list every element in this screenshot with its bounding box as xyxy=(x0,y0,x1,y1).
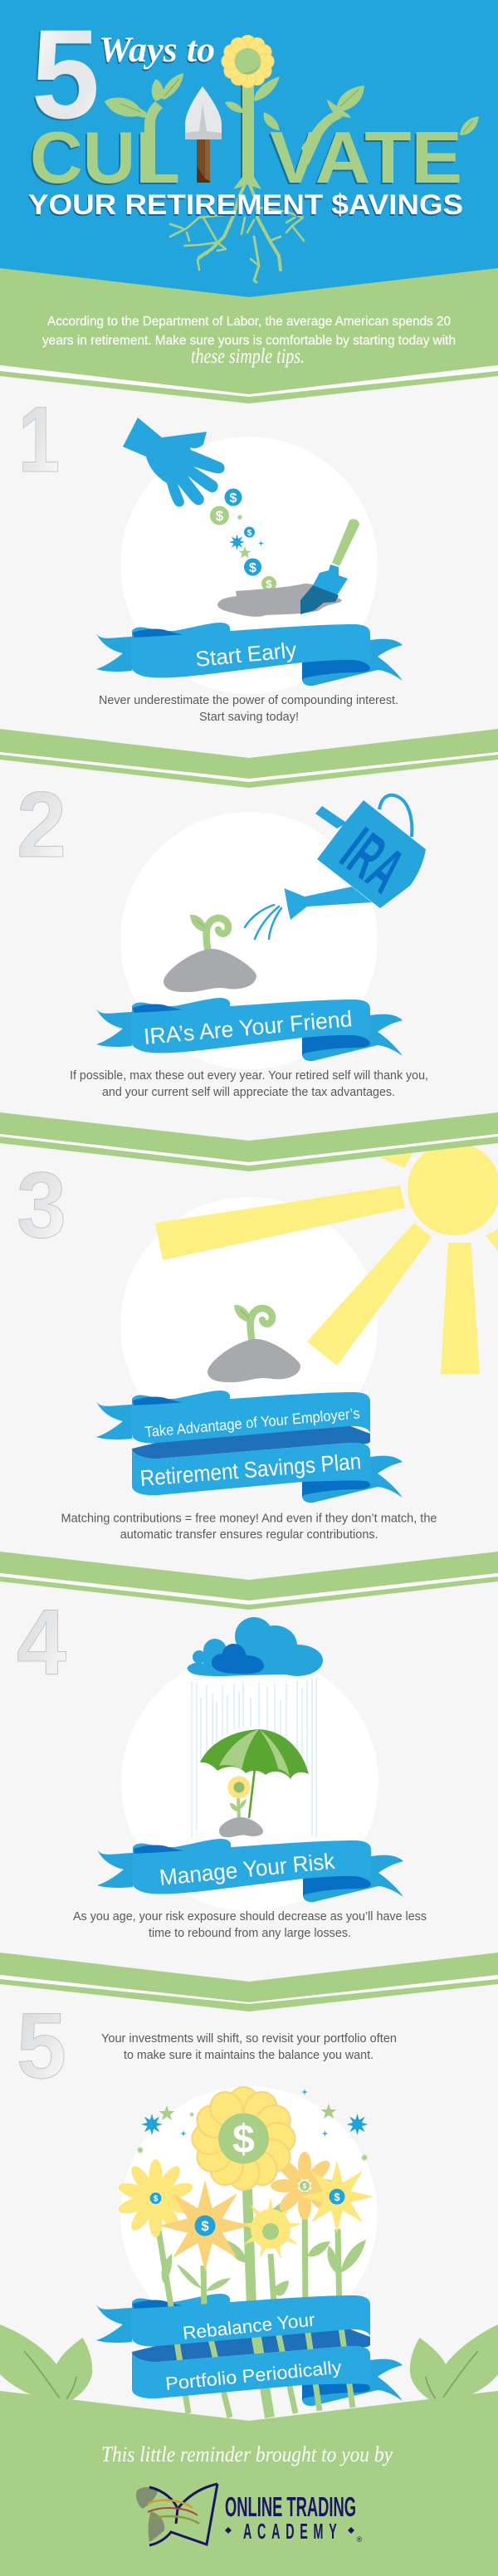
back yellow flower xyxy=(238,2197,303,2261)
icon: watering can xyxy=(284,795,426,920)
front ribbon for step 5 xyxy=(132,2295,370,2398)
mound with sprout xyxy=(208,1305,300,1382)
intro text xyxy=(42,315,456,348)
double ribbon xyxy=(96,1391,403,1503)
icon: trowel as letter T xyxy=(185,86,222,183)
sun and rays section 3 xyxy=(155,1142,498,1374)
panel: step 5 rebalance xyxy=(0,1994,498,2417)
coins and sparkles falling: $ xyxy=(230,491,237,506)
icon: watering can: IRA xyxy=(329,814,417,907)
front ribbon for step 5: Portfolio Periodically xyxy=(164,2357,342,2394)
back ribbon parts xyxy=(96,2294,403,2406)
big dollar sunflower: $ xyxy=(232,2118,255,2162)
text block: If possible, max these out every year. Your retired self will thank you, xyxy=(70,1069,428,1083)
decorative stars xyxy=(136,2089,369,2162)
text block xyxy=(99,694,398,724)
big number 5: 5 xyxy=(30,5,98,147)
white circles behind illustrations xyxy=(120,437,378,2344)
mound with sprout xyxy=(164,915,256,992)
soil patch xyxy=(217,584,342,617)
panel: step 1 start early xyxy=(18,388,403,724)
panel: step 4 manage risk xyxy=(17,1591,427,1940)
chevron band 1 to 2 xyxy=(0,729,498,788)
ribbon: Start Early xyxy=(194,637,298,672)
text block: time to rebound from any large losses. xyxy=(149,1927,351,1940)
footer panel xyxy=(0,2391,498,2576)
ribbon xyxy=(97,1839,403,1902)
leaves and stems growing from letters xyxy=(105,73,479,183)
flower stems xyxy=(158,2189,353,2417)
ribbon title: Manage Your Risk xyxy=(159,1849,336,1890)
logo: online trading academy xyxy=(136,2484,363,2545)
roots illustration xyxy=(170,178,304,282)
intro text: years in retirement. Make sure yours is comfortable by starting today with xyxy=(42,334,456,348)
header panel xyxy=(0,0,498,299)
icon: shovel xyxy=(300,519,359,614)
left yellow flower xyxy=(116,2159,195,2237)
ribbon xyxy=(96,998,403,1061)
heading: CULTIVATE letters: VATE xyxy=(270,116,462,198)
subheading: your retirement savings: YOUR RETIREMENT $AVINGS xyxy=(28,189,463,221)
right yellow star flower xyxy=(300,2160,374,2233)
script heading: Ways to: Ways to xyxy=(98,32,214,71)
right orange flower: $ xyxy=(303,2183,307,2190)
rain lines xyxy=(192,1677,316,1837)
text block: and your current self will appreciate the tax advantages. xyxy=(102,1086,395,1099)
flower leaves xyxy=(161,2196,366,2295)
panel: step 3 employer plan xyxy=(17,1153,437,1542)
number 3: 3 xyxy=(17,1153,66,1257)
heading: CULTIVATE letters xyxy=(28,116,462,200)
intro text: According to the Department of Labor, the average American spends 20 xyxy=(47,315,451,329)
text block: Matching contributions = free money! And even if they don’t match, the xyxy=(61,1513,437,1526)
coins and sparkles falling: $ xyxy=(249,561,256,575)
chevron band 3 to 4 xyxy=(0,1552,498,1610)
coins and sparkles falling xyxy=(210,488,276,591)
script heading: Ways to: Ways to xyxy=(99,31,215,70)
text block xyxy=(73,1910,427,1940)
right orange flower xyxy=(271,2152,339,2220)
ribbon xyxy=(96,623,403,686)
heading: CULTIVATE letters: CUL xyxy=(30,116,180,198)
icon: rain cloud xyxy=(188,1617,323,1676)
number 2: 2 xyxy=(17,773,66,877)
text block xyxy=(101,2032,397,2062)
text block: Your investments will shift, so revisit your portfolio often xyxy=(101,2032,397,2046)
intro script line: these simple tips. xyxy=(191,345,305,368)
chevron band 4 to 5 xyxy=(0,1953,498,2011)
text block: As you age, your risk exposure should decrease as you’ll have less xyxy=(73,1910,427,1923)
number 5: 5 xyxy=(17,1994,66,2098)
orange star flower xyxy=(159,2180,251,2271)
intro band xyxy=(0,268,498,403)
icon: sunflower stem as letter I xyxy=(221,35,280,189)
double ribbon: Take Advantage of Your Employer’s xyxy=(144,1405,360,1440)
double ribbon: Retirement Savings Plan xyxy=(139,1449,362,1491)
icon: umbrella xyxy=(200,1729,309,1818)
big dollar sunflower xyxy=(191,2086,296,2191)
front ribbon for step 5: Rebalance Your xyxy=(182,2309,316,2344)
chevron band 2 to 3 xyxy=(0,1112,498,1171)
logo: online trading academy: ONLINE TRADING xyxy=(225,2491,356,2522)
ribbon title: IRA’s Are Your Friend xyxy=(143,1006,354,1049)
number 4: 4 xyxy=(17,1591,66,1694)
left yellow flower: $ xyxy=(154,2195,159,2203)
text block xyxy=(70,1069,428,1099)
logo: online trading academy: ® xyxy=(357,2535,363,2544)
coins and sparkles falling: $ xyxy=(216,508,224,524)
icon: water spray xyxy=(245,905,281,939)
big leaves left xyxy=(0,2324,92,2403)
number 1: 1 xyxy=(18,388,60,491)
heading: CULTIVATE letters: VATE xyxy=(268,118,461,200)
coins and sparkles falling: $ xyxy=(247,529,252,538)
footer script line: This little reminder brought to you by xyxy=(101,2442,393,2466)
text block: Start saving today! xyxy=(199,711,299,724)
orange star flower: $ xyxy=(201,2218,209,2234)
text block: to make sure it maintains the balance you want. xyxy=(124,2049,374,2062)
icon: hand xyxy=(123,418,224,506)
subheading: your retirement savings: YOUR RETIREMENT $AVINGS xyxy=(27,191,462,222)
big leaves right xyxy=(410,2324,498,2403)
text block xyxy=(61,1513,437,1542)
big number 5: 5 xyxy=(32,3,100,145)
icon: small sunflower on mound xyxy=(219,1776,263,1837)
text block: Never underestimate the power of compounding interest. xyxy=(99,694,398,707)
logo: online trading academy: ACADEMY xyxy=(243,2520,337,2544)
coins and sparkles falling: $ xyxy=(266,578,272,590)
text block: automatic transfer ensures regular contributions. xyxy=(120,1528,378,1542)
panel: step 2 IRAs xyxy=(17,773,428,1099)
right yellow star flower: $ xyxy=(334,2191,340,2203)
heading: CULTIVATE letters: CUL xyxy=(28,118,178,200)
